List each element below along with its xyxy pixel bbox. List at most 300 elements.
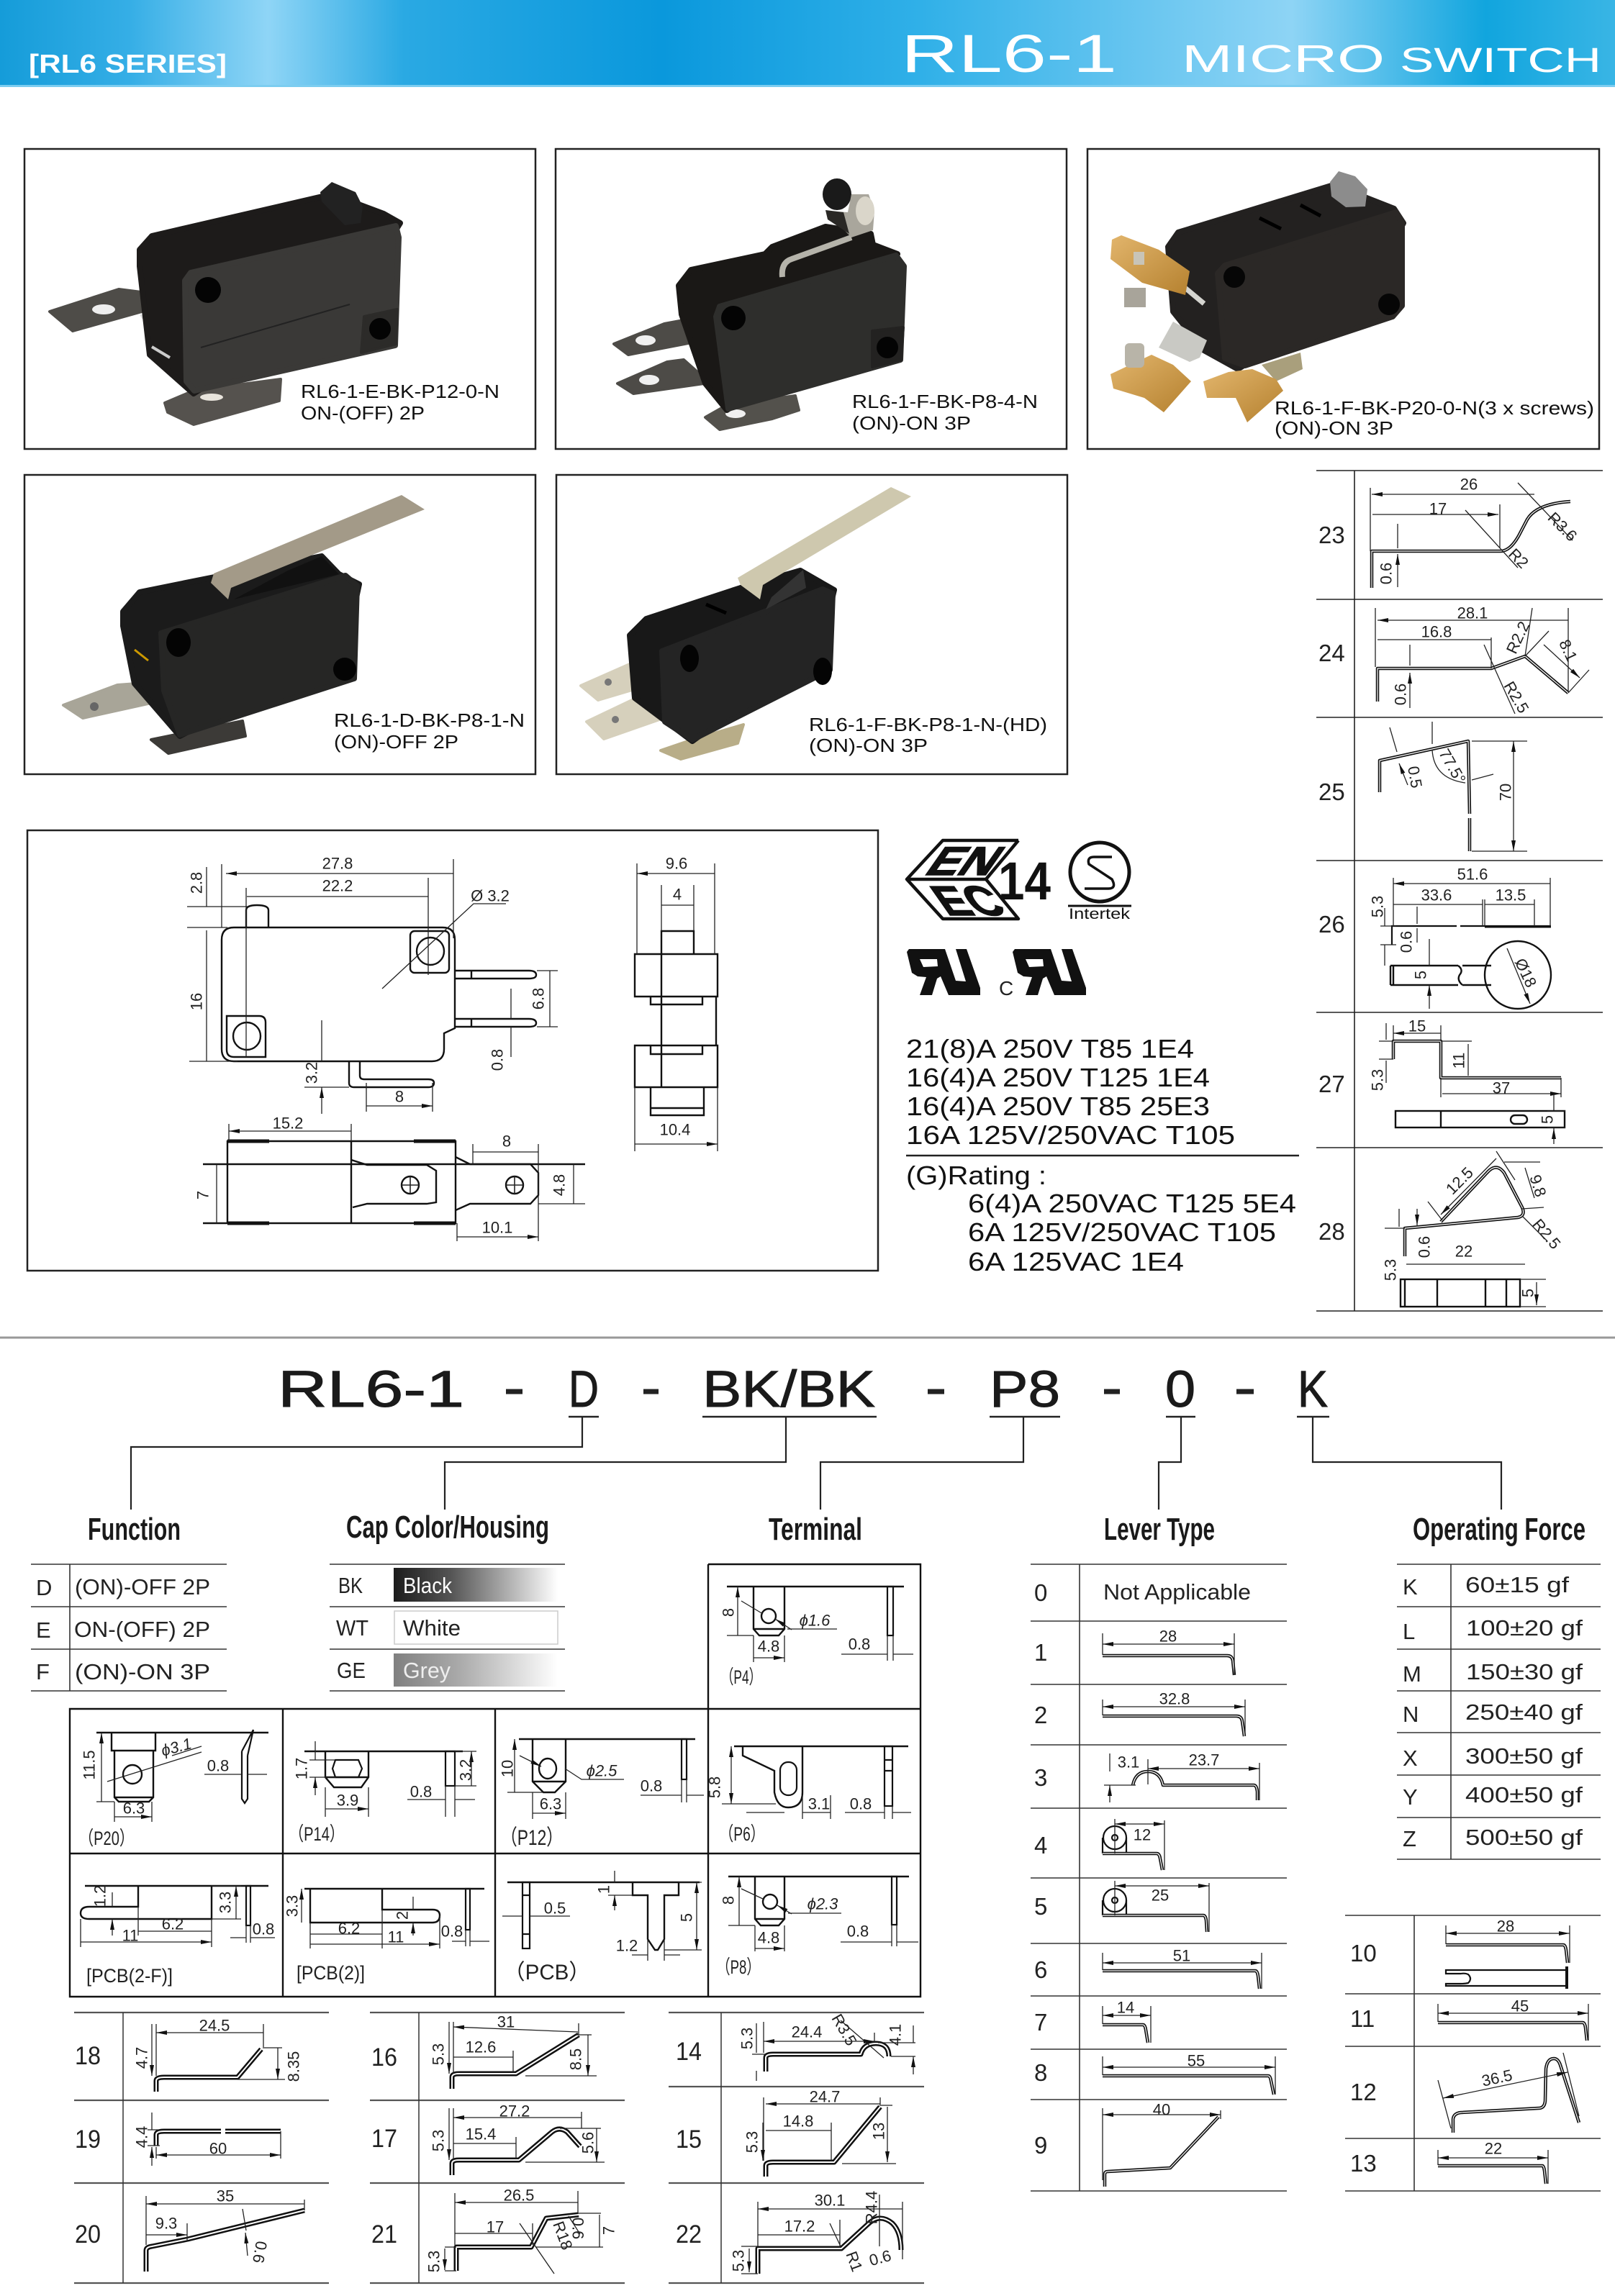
terminal P4: 0.8 — [849, 1635, 870, 1653]
table: operating force: 500±50 gf — [1465, 1825, 1583, 1850]
lever 21: 5.3 — [425, 2251, 443, 2272]
terminal P4: （P4） — [721, 1666, 761, 1688]
table: operating force: M — [1403, 1661, 1421, 1687]
table: levers 23 to 28 — [1316, 471, 1603, 1311]
lever 28: R2.5 — [1529, 1215, 1565, 1253]
terminal PCB(2): 6.2 — [338, 1920, 360, 1937]
icon: cUR mark — [999, 949, 1086, 999]
terminal P20: ϕ3.1 — [159, 1734, 194, 1760]
lever 21: R18 — [549, 2219, 576, 2252]
lever 13 — [1350, 2140, 1548, 2184]
drawing: bottom view of switch: 15.2 — [273, 1114, 303, 1133]
lever 13: 13 — [1350, 2150, 1377, 2177]
lever 24: 24 — [1318, 640, 1345, 666]
panel: photo RL6-1-F-BK-P8-1-N-(HD) — [556, 475, 1067, 774]
lever 16 — [371, 2013, 597, 2089]
lever 18: 24.5 — [199, 2016, 230, 2035]
terminal PCB(2-F): 6.2 — [162, 1915, 184, 1933]
terminal P8: 8 — [720, 1896, 737, 1905]
terminal P6: 0.8 — [850, 1794, 872, 1813]
text: ratings: 6A 125V/250VAC T105 — [968, 1217, 1276, 1247]
lever 26: 51.6 — [1457, 865, 1488, 884]
main title: SWITCH — [1400, 42, 1601, 80]
drawing: end view of switch: 9.6 — [666, 855, 687, 872]
lever 17 — [371, 2102, 605, 2175]
drawing: bottom view of switch: 10.1 — [482, 1219, 512, 1236]
icon: ENEC 14 mark — [907, 839, 1051, 925]
lever 6: 51 — [1173, 1947, 1190, 1964]
lever 15: 5.3 — [743, 2131, 761, 2153]
drawing: bottom view of switch: 4.8 — [550, 1174, 569, 1196]
table: cap color: Black — [403, 1573, 452, 1598]
lever 27: 5 — [1539, 1115, 1556, 1124]
drawing: side view of switch: 6.8 — [530, 988, 547, 1009]
table: operating force: 250±40 gf — [1465, 1700, 1583, 1725]
caption: (ON)-ON 3P — [852, 412, 971, 434]
lever 5: 25 — [1152, 1887, 1169, 1904]
table: cap color: WT — [336, 1615, 368, 1641]
part number code: P8 — [990, 1361, 1060, 1418]
lever 10: 10 — [1350, 1940, 1377, 1966]
terminal P8: 0.8 — [847, 1923, 869, 1940]
lever 14: R3.5 — [828, 2011, 860, 2048]
table: cap color: White — [403, 1615, 461, 1641]
table: operating force: Y — [1403, 1784, 1418, 1810]
lever 26: 5.3 — [1369, 896, 1386, 917]
table: function: (ON)-OFF 2P — [75, 1574, 210, 1600]
table: cap color — [330, 1564, 565, 1691]
lever 26: 5 — [1412, 971, 1429, 979]
lever 19: 60 — [209, 2140, 227, 2157]
table: function: E — [36, 1617, 51, 1643]
lever 4: 12 — [1134, 1826, 1151, 1843]
lever 22 — [676, 2191, 902, 2274]
lever 9: 40 — [1153, 2101, 1170, 2118]
lever 25: 77.5° — [1435, 745, 1470, 787]
table: operating force: N — [1403, 1702, 1419, 1727]
terminal P14: 1.7 — [292, 1758, 311, 1779]
lever 21: 21 — [371, 2220, 397, 2249]
terminal PCB: （PCB） — [504, 1961, 590, 1984]
caption: RL6-1-F-BK-P8-4-N — [852, 391, 1038, 412]
photo: switch with long lever, HD — [581, 487, 911, 759]
lever 15: 14.8 — [783, 2113, 813, 2130]
lever 28: 5.3 — [1382, 1259, 1399, 1281]
lever 2: 2 — [1034, 1702, 1047, 1728]
lever 17: 17 — [371, 2125, 397, 2153]
lever 25 — [1318, 722, 1527, 851]
lever 21: 0.6 — [569, 2218, 587, 2239]
header banner — [0, 0, 1615, 87]
terminal PCB: 1 — [594, 1885, 613, 1894]
main title: MICRO — [1182, 37, 1385, 81]
table: levers 16, 17, 21 — [370, 2013, 625, 2283]
table: function: (ON)-ON 3P — [75, 1659, 210, 1684]
lever 18: 18 — [75, 2042, 101, 2070]
terminal P12: 6.3 — [540, 1794, 561, 1813]
certification logos — [907, 839, 1131, 999]
lever 16: 5.3 — [429, 2043, 448, 2065]
terminal P14: （P14） — [289, 1823, 344, 1845]
panel: photo RL6-1-F-BK-P8-4-N — [556, 149, 1067, 449]
connector lines — [131, 1417, 1501, 1510]
terminal PCB(2): 3.3 — [284, 1895, 301, 1917]
lever 3 — [1034, 1751, 1259, 1802]
lever 24 — [1318, 604, 1589, 716]
lever 20: 35 — [217, 2187, 234, 2205]
lever 22: R1 — [842, 2249, 867, 2274]
table: operating force — [1397, 1564, 1601, 1859]
panel: photo RL6-1-F-BK-P20-0-N — [1087, 149, 1599, 449]
lever 20: 9.3 — [155, 2215, 177, 2232]
drawing: end view of switch: 4 — [673, 885, 682, 904]
lever 4: 4 — [1034, 1832, 1047, 1859]
lever 9 — [1034, 2101, 1221, 2187]
icon: ENEC 14 mark: EN — [916, 839, 1014, 884]
drawing: side view of switch: 22.2 — [322, 876, 353, 895]
table: cap color: Grey — [403, 1658, 451, 1683]
drawing: side view of switch: 27.8 — [322, 855, 353, 872]
lever 5: 5 — [1034, 1893, 1047, 1920]
text: ratings: (G)Rating : — [906, 1161, 1046, 1190]
lever 25: 70 — [1497, 784, 1514, 801]
caption — [852, 391, 1038, 434]
terminal P14 — [289, 1741, 476, 1845]
lever 1: 28 — [1159, 1628, 1177, 1645]
lever 1: 1 — [1034, 1639, 1047, 1666]
terminal P20: （P20） — [79, 1828, 134, 1849]
part number code: K — [1298, 1361, 1328, 1418]
lever 23 — [1318, 475, 1580, 588]
lever 16: 16 — [371, 2043, 397, 2072]
text: ratings: 6A 125VAC 1E4 — [968, 1247, 1184, 1276]
lever 2: 32.8 — [1159, 1689, 1190, 1708]
lever 2 — [1034, 1689, 1245, 1736]
lever 16: 31 — [497, 2013, 515, 2030]
text: ratings: 6(4)A 250VAC T125 5E4 — [968, 1189, 1296, 1218]
drawing: bottom view of switch: 7 — [194, 1191, 212, 1199]
lever 16: 12.6 — [466, 2038, 496, 2056]
lever 21: 26.5 — [504, 2186, 534, 2205]
lever 10 — [1350, 1917, 1570, 1989]
lever 26 — [1318, 865, 1551, 1009]
icon: S mark Intertek: Intertek — [1069, 906, 1131, 922]
lever 8: 8 — [1034, 2059, 1047, 2086]
lever 15: 15 — [676, 2125, 702, 2154]
drawing: side view of switch: 2.8 — [187, 872, 206, 894]
terminal P12: （P12） — [501, 1826, 563, 1850]
lever 27: 27 — [1318, 1071, 1345, 1097]
lever 28: 0.6 — [1415, 1236, 1434, 1258]
terminal P12 — [498, 1739, 704, 1850]
terminal PCB — [502, 1871, 702, 1984]
terminal P8 — [717, 1877, 918, 1978]
lever 22: 22 — [676, 2220, 702, 2249]
lever 23: R3.6 — [1544, 509, 1580, 545]
part number code: RL6-1 — [278, 1361, 464, 1418]
caption: ON-(OFF) 2P — [301, 402, 425, 424]
lever 1 — [1034, 1628, 1234, 1675]
lever 14: 4.1 — [887, 2024, 904, 2046]
series label: [RL6 SERIES] — [29, 49, 227, 78]
terminal PCB(2-F): 1.2 — [91, 1885, 109, 1907]
lever 0 — [1034, 1579, 1251, 1606]
lever 28: 9.8 — [1526, 1173, 1550, 1199]
lever 16: 8.5 — [567, 2048, 584, 2070]
table: lever type 0 to 9 — [1031, 1564, 1287, 2191]
text: ratings — [906, 1034, 1299, 1276]
terminal P8: （P8） — [717, 1956, 760, 1978]
terminal P14: 3.9 — [337, 1792, 358, 1809]
lever 4 — [1034, 1819, 1164, 1870]
text: ratings: 21(8)A 250V T85 1E4 — [906, 1034, 1194, 1063]
table: function: D — [36, 1575, 52, 1600]
lever 27: 5.3 — [1369, 1069, 1386, 1091]
photo: switch with long lever — [63, 495, 425, 753]
lever 5 — [1034, 1881, 1209, 1932]
part number code: D — [569, 1361, 599, 1418]
panel: photo RL6-1-D-BK-P8-1-N — [24, 475, 535, 774]
table: function — [31, 1564, 227, 1691]
terminal P8: ϕ2.3 — [808, 1895, 838, 1912]
lever 21 — [371, 2186, 618, 2274]
table: operating force: Z — [1403, 1826, 1416, 1851]
part number code: 0 — [1165, 1361, 1195, 1418]
table: cap color: GE — [337, 1658, 366, 1683]
table: operating force: L — [1403, 1619, 1415, 1644]
lever 23: 23 — [1318, 522, 1345, 548]
lever 22: 0.6 — [867, 2246, 893, 2269]
table: function: ON-(OFF) 2P — [74, 1617, 210, 1642]
terminal PCB(2-F) — [81, 1885, 275, 1987]
icon: S mark Intertek — [1068, 843, 1131, 922]
lever 24: 28.1 — [1457, 604, 1488, 622]
lever 28: 28 — [1318, 1218, 1345, 1245]
lever 11: 45 — [1511, 1997, 1529, 2015]
terminal PCB(2): 2 — [393, 1911, 412, 1920]
lever 7: 7 — [1034, 2009, 1047, 2036]
table: operating force: K — [1403, 1574, 1418, 1600]
lever 25: 25 — [1318, 779, 1345, 805]
table: cap color: BK — [338, 1573, 363, 1598]
terminal P6: （P6） — [720, 1823, 764, 1845]
lever 21: 17 — [487, 2218, 504, 2236]
terminal PCB(2): 11 — [388, 1928, 404, 1946]
headings: Cap Color/Housing — [346, 1510, 549, 1545]
terminal P14: 0.8 — [410, 1783, 432, 1800]
lever 8 — [1034, 2052, 1275, 2095]
terminal PCB(2): [PCB(2)] — [297, 1962, 365, 1984]
caption — [1275, 397, 1594, 439]
lever 14: 14 — [676, 2038, 702, 2066]
terminal PCB(2): 0.8 — [441, 1923, 463, 1940]
terminal P12: 0.8 — [641, 1777, 662, 1794]
lever 26: 33.6 — [1421, 886, 1452, 904]
caption — [809, 714, 1047, 756]
lever 6 — [1034, 1947, 1262, 1989]
lever 26: 0.6 — [1398, 931, 1415, 953]
icon: ENEC 14 mark: 14 — [998, 851, 1051, 911]
lever 10: 28 — [1497, 1917, 1514, 1936]
table: operating force: 150±30 gf — [1466, 1659, 1583, 1684]
lever 12: 36.5 — [1480, 2066, 1514, 2090]
drawing: side view of switch: 3.2 — [302, 1062, 321, 1084]
terminal P20 — [79, 1730, 268, 1849]
terminal PCB: 1.2 — [616, 1937, 638, 1954]
drawing: side view of switch — [187, 855, 558, 1114]
lever 27 — [1318, 1017, 1565, 1144]
text: ratings: 16A 125V/250VAC T105 — [906, 1120, 1235, 1150]
photo: switch with screw terminals — [1110, 171, 1403, 422]
lever 18: 4.7 — [132, 2047, 151, 2069]
lever 18 — [75, 2016, 302, 2092]
main title — [901, 24, 1601, 83]
caption: (ON)-OFF 2P — [334, 731, 458, 753]
lever 25: 0.5 — [1404, 765, 1426, 789]
lever 19 — [75, 2113, 281, 2166]
terminal P4: ϕ1.6 — [800, 1612, 831, 1629]
lever 19: 19 — [75, 2125, 101, 2154]
terminal P6: 3.1 — [808, 1794, 830, 1813]
terminal P8: 4.8 — [758, 1928, 779, 1947]
lever 28: 12.5 — [1442, 1163, 1477, 1198]
lever 20 — [75, 2187, 304, 2272]
drawing: bottom view of switch — [194, 1114, 585, 1241]
lever 24: R2.2 — [1503, 619, 1533, 656]
lever 15: 24.7 — [810, 2088, 840, 2105]
table: levers 10 to 13 — [1345, 1915, 1601, 2191]
terminal P20: 6.3 — [123, 1799, 145, 1818]
drawing: bottom view of switch: 8 — [502, 1133, 511, 1150]
lever 26: Ø18 — [1511, 956, 1540, 990]
lever 8: 55 — [1188, 2052, 1205, 2069]
lever 3: 3.1 — [1118, 1753, 1139, 1771]
lever 14 — [676, 2011, 915, 2081]
lever 13: 22 — [1485, 2140, 1502, 2157]
lever 24: 0.6 — [1392, 684, 1409, 705]
table: operating force: 100±20 gf — [1466, 1615, 1583, 1641]
headings: Function — [88, 1512, 181, 1547]
panel: dimension drawing — [27, 830, 878, 1271]
caption: RL6-1-D-BK-P8-1-N — [334, 709, 525, 731]
drawing: side view of switch: 8 — [395, 1088, 404, 1105]
table: operating force: 400±50 gf — [1465, 1782, 1583, 1807]
icon: cUR mark: C — [999, 977, 1013, 999]
lever 17: 5.3 — [429, 2130, 448, 2151]
terminal PCB(2-F): 3.3 — [216, 1892, 235, 1913]
table: levers 14, 15, 22 — [669, 2011, 924, 2283]
lever 24: R2.5 — [1501, 679, 1532, 716]
caption: RL6-1-F-BK-P20-0-N(3 x screws) — [1275, 397, 1594, 419]
drawing: side view of switch: Ø 3.2 — [471, 886, 510, 905]
terminal P6: 5.8 — [705, 1777, 724, 1798]
panel: terminal grid — [70, 1564, 920, 1997]
drawing: end view of switch: 10.4 — [660, 1121, 690, 1138]
lever 26: 26 — [1318, 911, 1345, 938]
terminal P12: 10 — [498, 1760, 517, 1777]
lever 28: 5 — [1519, 1289, 1537, 1297]
main title: RL6-1 — [901, 24, 1117, 83]
terminal PCB(2-F): 11 — [122, 1927, 138, 1944]
lever 19: 4.4 — [132, 2126, 151, 2148]
lever 0: Not Applicable — [1103, 1579, 1251, 1605]
table: operating force: 60±15 gf — [1465, 1572, 1569, 1597]
lever 6: 6 — [1034, 1956, 1047, 1983]
lever 22: R4.4 — [862, 2191, 881, 2224]
lever 12 — [1350, 2053, 1579, 2133]
lever 9: 9 — [1034, 2132, 1047, 2159]
lever 28 — [1318, 1151, 1565, 1307]
terminal P20: 0.8 — [207, 1757, 229, 1774]
lever 3: 23.7 — [1189, 1751, 1219, 1769]
terminal P12: ϕ2.5 — [587, 1761, 618, 1780]
terminal P20: 11.5 — [81, 1750, 98, 1780]
table: operating force: X — [1403, 1746, 1418, 1771]
lever 11: 11 — [1350, 2005, 1375, 2032]
lever 28: 22 — [1455, 1242, 1472, 1261]
lever 15: 13 — [869, 2123, 888, 2140]
text: ratings: 16(4)A 250V T125 1E4 — [906, 1063, 1210, 1092]
headings — [88, 1510, 1585, 1547]
terminal P4: 8 — [720, 1608, 737, 1617]
lever 17: 15.4 — [466, 2125, 496, 2143]
lever 11 — [1350, 1997, 1588, 2041]
terminal PCB(2) — [284, 1889, 489, 1984]
lever 23: 0.6 — [1378, 563, 1395, 584]
lever 24: 16.8 — [1421, 623, 1452, 640]
caption: (ON)-ON 3P — [1275, 417, 1393, 439]
part number code: BK/BK — [702, 1361, 875, 1418]
drawing: end view of switch — [635, 855, 718, 1151]
text: ratings: 16(4)A 250V T85 25E3 — [906, 1092, 1210, 1121]
caption — [334, 709, 525, 753]
terminal P4 — [720, 1587, 913, 1688]
caption — [301, 381, 499, 424]
icon: ENEC 14 mark: EC — [920, 877, 1015, 925]
lever 22: 30.1 — [815, 2192, 845, 2209]
lever 26: 13.5 — [1496, 886, 1526, 904]
lever 22: 5.3 — [730, 2250, 747, 2272]
lever 22: 17.2 — [784, 2218, 815, 2235]
lever 3: 3 — [1034, 1764, 1047, 1791]
lever 27: 37 — [1493, 1079, 1510, 1097]
lever 14: 5.3 — [738, 2028, 756, 2049]
lever 7: 14 — [1117, 1999, 1134, 2016]
caption: RL6-1-E-BK-P12-0-N — [301, 381, 499, 402]
lever 21: 7 — [600, 2226, 618, 2235]
lever 18: 8.35 — [285, 2051, 302, 2082]
table: function: F — [36, 1659, 50, 1684]
panel: photo RL6-1-E-BK-P12-0-N — [24, 149, 535, 449]
terminal PCB(2-F): [PCB(2-F)] — [86, 1965, 173, 1987]
icon: UR recognized mark — [907, 949, 980, 995]
lever 12: 12 — [1350, 2079, 1377, 2105]
table: operating force: 300±50 gf — [1465, 1743, 1583, 1769]
terminal P6 — [705, 1746, 911, 1845]
terminal PCB: 0.5 — [544, 1900, 566, 1917]
photo: switch with plunger — [50, 182, 400, 425]
lever 27: 11 — [1449, 1053, 1468, 1068]
lever 0: 0 — [1034, 1579, 1047, 1606]
lever 15 — [676, 2088, 896, 2177]
caption: (ON)-ON 3P — [809, 735, 928, 756]
terminal P4: 4.8 — [758, 1638, 779, 1655]
photo: switch with roller lever — [614, 178, 904, 430]
drawing: side view of switch: 0.8 — [488, 1049, 507, 1071]
caption: RL6-1-F-BK-P8-1-N-(HD) — [809, 714, 1047, 735]
terminal PCB: 5 — [678, 1913, 695, 1922]
lever 23: 17 — [1429, 499, 1447, 518]
